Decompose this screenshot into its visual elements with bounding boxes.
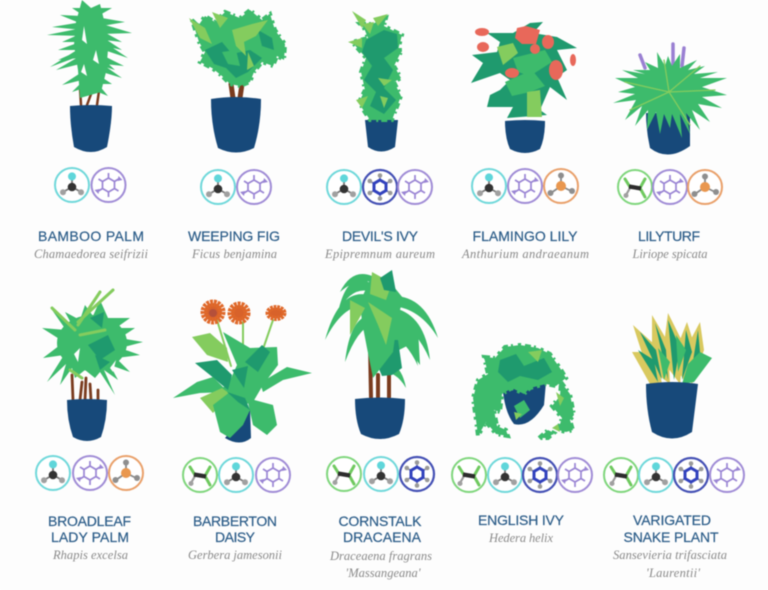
icon: xylene [92,168,126,202]
name: DEVIL'S IVY [342,228,419,244]
icon: xylene [508,169,542,203]
name: ENGLISH IVY [478,512,565,528]
scientific name: Hedera helix [488,531,553,545]
panel: weeping fig [188,10,285,261]
scientific name: Epipremnum aureum [324,247,435,261]
panel: bamboo palm [34,0,149,261]
scientific name: Liriope spicata [632,247,708,261]
icon: formaldehyde [488,458,522,492]
scientific name: Draceaena fragrans [329,549,432,563]
plant: cornstalk dracaena [325,270,438,439]
plant: varigated snake plant [632,313,712,438]
icon: xylene [558,458,592,492]
icon: formaldehyde [327,170,361,204]
icon: benzene [363,170,397,204]
plant: devil's ivy [348,11,402,152]
icon: trichloroethylene [452,458,486,492]
icon: xylene [73,456,107,490]
name: CORNSTALK [338,513,422,529]
icon: ammonia [544,169,578,203]
icon: benzene [674,458,708,492]
scientific name: Ficus benjamina [191,247,277,261]
icon: ammonia [109,456,143,490]
icon: formaldehyde [36,456,70,490]
panel: cornstalk dracaena: 'Massangeana' [346,566,421,580]
panel: varigated snake plant [604,313,744,580]
panel: barberton daisy [173,303,312,562]
icon: formaldehyde [639,458,673,492]
name: FLAMINGO LILY [472,228,578,244]
panel: english ivy [452,345,592,545]
icon: xylene [653,170,687,204]
icon: benzene [400,457,434,491]
icon: formaldehyde [201,170,235,204]
icon: trichloroethylene [183,458,217,492]
name: WEEPING FIG [188,228,280,244]
plant: lilyturf [613,44,727,155]
panel: lilyturf [613,44,727,261]
name: BAMBOO PALM [38,228,144,244]
icon: ammonia [688,170,722,204]
panel: varigated snake plant: 'Laurentii' [646,566,700,580]
plant: broadleaf lady palm [42,290,143,441]
scientific name: Sansevieria trifasciata [613,548,727,562]
plant: weeping fig [189,10,285,152]
icon: trichloroethylene [618,170,652,204]
panel: cornstalk dracaena: DRACAENA [343,529,422,545]
panel: barberton daisy: DAISY [215,529,256,545]
scientific name: Rhapis excelsa [52,548,128,562]
icon: formaldehyde [55,168,89,202]
panel: varigated snake plant: SNAKE PLANT [624,529,719,545]
icon: xylene [398,170,432,204]
plant: english ivy [473,345,574,438]
icon: trichloroethylene [327,457,361,491]
scientific name: Anthurium andraeanum [461,247,589,261]
panel: devil's ivy [324,11,435,261]
panel: broadleaf lady palm [36,290,143,562]
panel: flamingo lily [461,22,589,261]
scientific name: Chamaedorea seifrizii [34,247,149,261]
name: LILYTURF [638,228,700,244]
icon: xylene [237,170,271,204]
plant: bamboo palm [47,0,132,152]
plant: barberton daisy [173,303,312,442]
panel: broadleaf lady palm: LADY PALM [51,529,129,545]
icon: xylene [710,458,744,492]
panel: cornstalk dracaena [325,270,438,580]
plant: flamingo lily [471,22,577,153]
icon: trichloroethylene [604,458,638,492]
icon: xylene [256,458,290,492]
scientific name: Gerbera jamesonii [188,548,283,562]
icon: formaldehyde [472,169,506,203]
icon: formaldehyde [219,458,253,492]
name: VARIGATED [633,512,711,528]
icon: formaldehyde [364,457,398,491]
name: BROADLEAF [48,513,131,529]
icon: benzene [523,458,557,492]
name: BARBERTON [193,513,277,529]
